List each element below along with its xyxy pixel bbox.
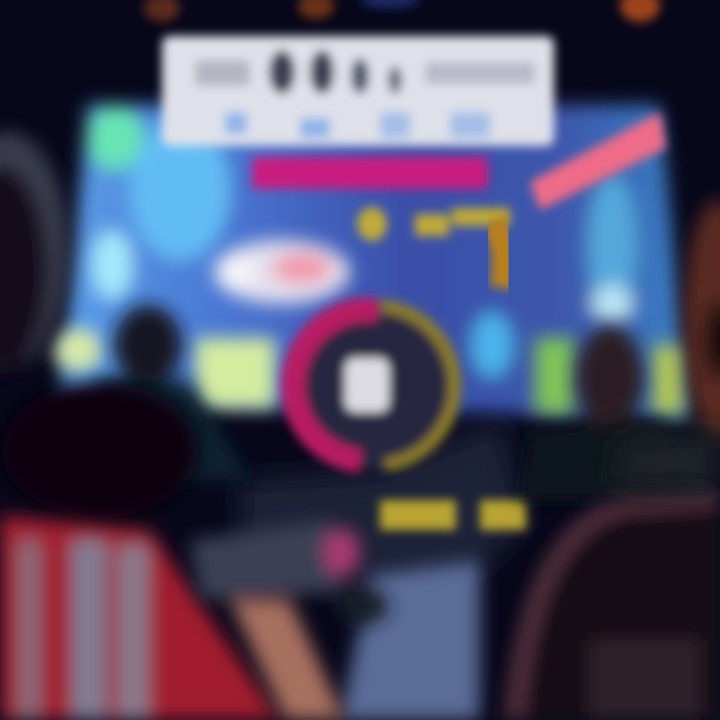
seat: left striped chair — [0, 515, 280, 720]
screen: right column — [588, 175, 636, 315]
title dark letters — [195, 50, 535, 138]
hand and phone — [190, 520, 388, 720]
title block — [162, 36, 554, 146]
screen: bright spot left — [92, 231, 132, 299]
audience: centre-left person — [80, 305, 250, 480]
audience: right head — [684, 200, 720, 440]
screen: light blue left area — [130, 120, 230, 260]
presentation screen — [60, 105, 690, 420]
screen: teal corner — [87, 106, 143, 170]
white cloud graphic — [214, 240, 350, 304]
pink subtitle bar — [252, 157, 488, 189]
right shoulder — [610, 430, 720, 490]
screen: lower blue glow — [472, 313, 512, 377]
donut: white centre icon — [345, 358, 389, 412]
audience: left head — [0, 132, 68, 375]
floor aisle — [340, 560, 480, 720]
donut: magenta arc — [293, 309, 378, 461]
lime panels — [54, 328, 684, 415]
seat: right chair — [500, 495, 720, 720]
yellow heading text — [357, 207, 510, 241]
ceiling lights — [144, 0, 660, 22]
orange hook shape — [492, 222, 504, 288]
screen: right lower bright — [592, 285, 632, 321]
pink diagonal ribbon — [530, 112, 666, 210]
audience: central body — [240, 420, 530, 590]
donut chart — [283, 301, 455, 469]
audience: right person — [520, 326, 720, 500]
seat: left dark headrest — [2, 382, 198, 518]
donut: gold arc — [382, 306, 455, 465]
yellow bottom text — [380, 500, 526, 530]
